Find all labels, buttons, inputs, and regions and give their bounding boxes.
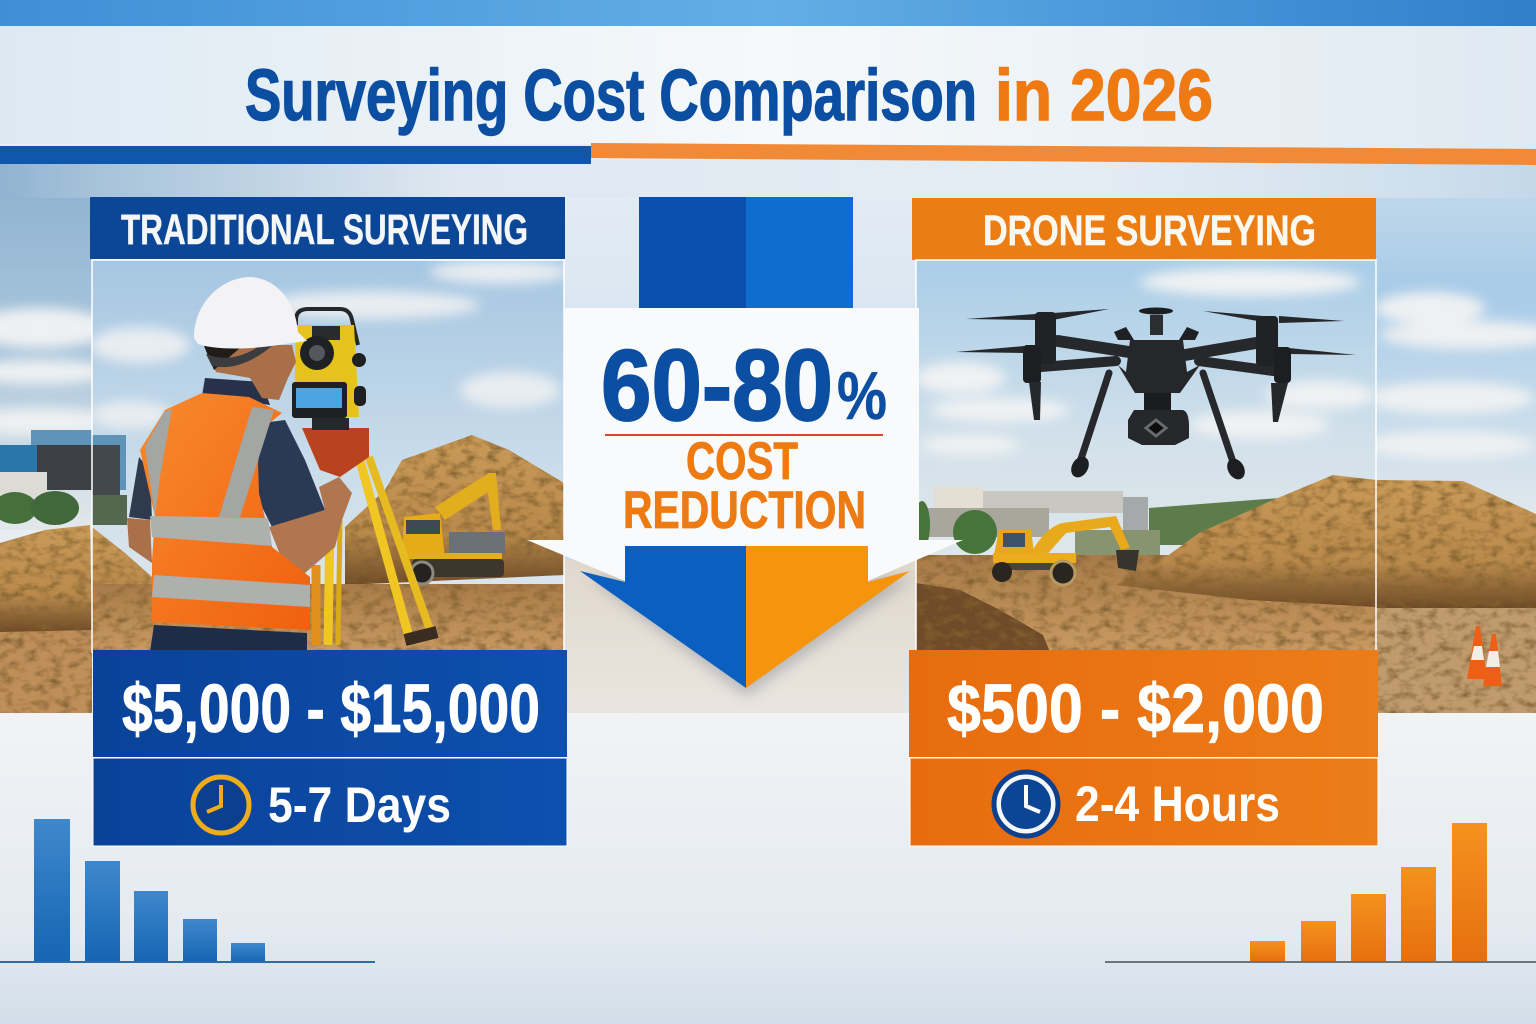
cost reduction label: COST — [686, 432, 798, 491]
title: Surveying Cost Comparison — [245, 56, 977, 136]
tripod — [316, 457, 437, 645]
heading: drone surveying: DRONE SURVEYING — [983, 207, 1316, 255]
savings figure: % — [837, 358, 887, 434]
center arrow callout — [527, 197, 963, 696]
panel: traditional surveying — [90, 197, 570, 846]
arrow head — [580, 546, 912, 696]
time box: drone: 2-4 Hours — [1075, 776, 1280, 832]
title: in 2026 — [995, 56, 1213, 136]
chart: increasing orange bars — [1105, 823, 1536, 963]
cost reduction label: REDUCTION — [623, 481, 866, 540]
panel: drone surveying — [909, 198, 1378, 846]
price box: traditional — [93, 650, 567, 757]
time box: drone — [910, 758, 1378, 846]
icon: surveyor — [127, 277, 352, 652]
time box: traditional: 5-7 Days — [268, 777, 451, 833]
icon: excavator — [402, 473, 505, 584]
title underline — [0, 143, 1536, 165]
heading: traditional surveying: TRADITIONAL SURVEYING — [121, 206, 528, 254]
top band — [0, 0, 1536, 26]
icon: gold clock — [193, 777, 249, 833]
heading: traditional surveying — [90, 197, 565, 259]
icon: yellow excavator — [992, 516, 1139, 585]
floor area — [0, 713, 1536, 1024]
chart: decreasing blue bars — [0, 819, 375, 963]
arrow shaft — [639, 197, 853, 309]
heading: drone surveying — [912, 198, 1376, 260]
title band — [0, 26, 1536, 150]
price box: drone: $500 - $2,000 — [947, 670, 1324, 747]
icon: drone — [956, 308, 1356, 483]
savings figure: 60-80 — [601, 330, 833, 442]
red divider — [605, 434, 883, 436]
price box: traditional: $5,000 - $15,000 — [122, 670, 540, 747]
cost reduction label — [623, 432, 866, 540]
photo: drone over site — [914, 260, 1376, 652]
photo: surveyor on site — [90, 260, 570, 652]
icon: blue clock — [994, 772, 1058, 836]
traffic cones — [1467, 626, 1502, 686]
price box: drone — [909, 650, 1378, 757]
white callout panel — [527, 308, 963, 581]
icon: total station — [292, 309, 366, 430]
time box: traditional — [93, 758, 567, 846]
